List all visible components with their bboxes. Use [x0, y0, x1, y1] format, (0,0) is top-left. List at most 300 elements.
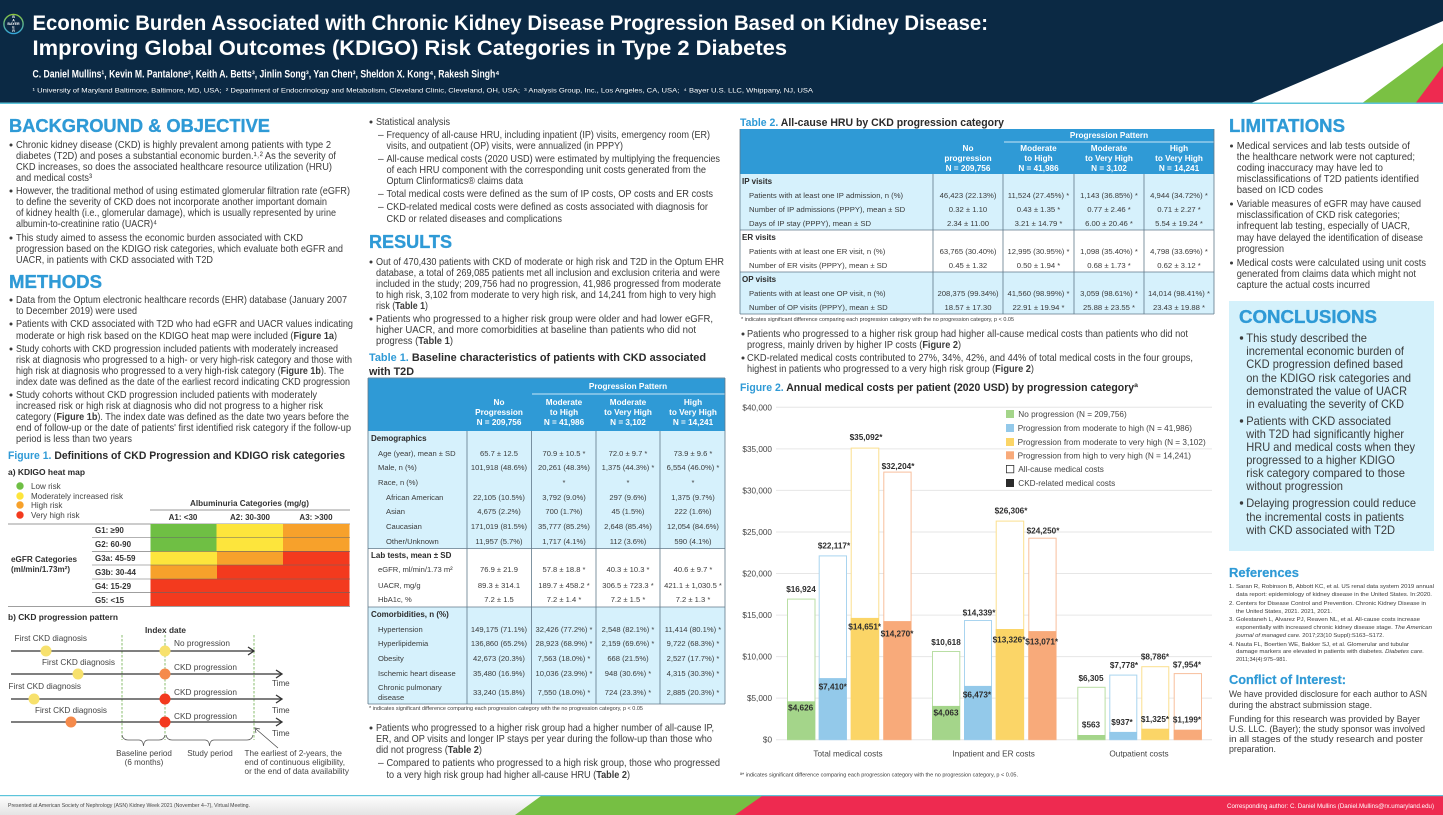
timeline 3: Time — [272, 706, 290, 715]
text block: methods bullets: Study cohorts with CKD progression included patients with moderately increased — [16, 344, 338, 355]
timeline 2: CKD progression — [174, 663, 237, 672]
heading: conclusions: CONCLUSIONS — [1239, 306, 1377, 327]
table 2 OP visit rows: 22.91 ± 19.94 * — [1012, 303, 1065, 312]
bar group: inpatient and ER costs: $10,618 — [931, 638, 961, 647]
timeline 2: Time — [272, 679, 290, 688]
conclusions bullets: CKD progression defined based — [1246, 358, 1403, 371]
table 1 comorbidity rows — [371, 610, 721, 702]
text block: HRU findings — [370, 723, 720, 781]
table 1 header: N = 41,986 — [544, 418, 585, 427]
table 1 demographics rows: 6,554 (46.0%) * — [667, 463, 719, 472]
text block: cost findings: progress, mainly driven by higher IP costs (Figure 2) — [747, 340, 961, 351]
text block: methods bullets: risk at diagnosis who progressed to a high- or very high-risk category and those with — [16, 355, 352, 366]
text block: conflict of interest: Funding for this research was provided by Bayer — [1229, 714, 1420, 724]
legend: risk levels: Moderately increased risk — [31, 492, 124, 501]
conclusions bullets: incremental economic burden of — [1246, 345, 1405, 358]
bar group: total medical costs: $22,117* — [818, 542, 851, 551]
arrow and end-of-study note: The earliest of 2-years, the — [244, 749, 342, 758]
table 1 comorbidity rows: 136,860 (65.2%) — [471, 639, 528, 648]
table 2 header: Moderate — [1020, 144, 1057, 153]
table 1 lab test rows: 40.3 ± 10.3 * — [606, 565, 650, 574]
table 1 heading: with T2D — [368, 366, 414, 378]
bar group: inpatient and ER costs: $13,326* — [993, 636, 1026, 645]
text block: conflict of interest: We have provided disclosure for each author to ASN — [1229, 689, 1427, 699]
table 1 demographics rows: * — [692, 478, 695, 487]
text block: results bullets: higher UACR, and more comorbidities at baseline than patients who did not — [376, 325, 696, 336]
text block: references: Nauta FL, Boertien WE, Bakker SJ, et al. Glomerular and tubular — [1236, 642, 1409, 648]
timeline 1: No progression — [174, 639, 230, 648]
arrow and end-of-study note: or the end of data availability — [244, 767, 350, 776]
text block: HRU findings: – — [378, 758, 384, 769]
table 2 ER visit rows: Number of ER visits (PPPY), mean ± SD — [749, 261, 888, 270]
text block: methods bullets: end of follow-up or the date of patients' first identified risk category if the follow-up — [16, 423, 351, 434]
albuminuria header: A1: <30 — [169, 513, 198, 522]
text block: background bullets: and medical costs³ — [16, 173, 93, 184]
eGFR row labels: G3a: 45-59 — [95, 554, 136, 563]
table 1 demographics rows: 297 (9.6%) — [609, 493, 647, 502]
table 1 header: Progression Pattern — [589, 382, 667, 391]
text block: statistical analysis: CKD or related diseases and complications — [386, 214, 562, 225]
text block: references: 4. — [1229, 642, 1234, 648]
heading: results: RESULTS — [369, 231, 452, 252]
text block: conflict of interest: preparation. — [1229, 744, 1276, 754]
table 1 demographics rows: 4,675 (2.2%) — [477, 507, 521, 516]
heading: methods: METHODS — [9, 271, 102, 292]
table 1 header — [368, 378, 725, 431]
text block: HRU findings: Patients who progressed to a higher risk group had a higher number of all-cause IP, — [376, 723, 714, 734]
text block: limitations: progression — [1237, 244, 1284, 255]
table 2 header — [740, 129, 1214, 174]
table 1 footnote: * indicates significant difference comparing each progression category with the no progression category, p < 0.05 — [369, 706, 643, 712]
timeline 4: Time — [272, 729, 290, 738]
icon: Bayer logo: A — [12, 18, 15, 22]
bar group: inpatient and ER costs: $13,071* — [1025, 638, 1059, 647]
text block: limitations: capture the actual costs incurred — [1237, 280, 1370, 291]
icon: Bayer logo: B — [12, 15, 15, 19]
icon: Bayer logo: BAYER — [7, 22, 20, 26]
text block: background bullets: Chronic kidney disease (CKD) is highly prevalent among patients with type 2 — [16, 140, 331, 151]
table 1 demographics rows: 101,918 (48.6%) — [471, 463, 528, 472]
table 1 demographics rows: 35,777 (85.2%) — [538, 522, 590, 531]
table 2 ER visit rows: 0.50 ± 1.94 * — [1017, 261, 1060, 270]
chart grid and y axis: $10,000 — [742, 653, 772, 662]
table 1 demographics rows: 112 (3.6%) — [610, 537, 647, 546]
chart grid and y axis: $15,000 — [742, 611, 772, 620]
text block: results bullets — [370, 257, 724, 347]
table 1 lab test rows: UACR, mg/g — [378, 581, 421, 590]
table 2 IP visit rows: Number of IP admissions (PPPY), mean ± SD — [749, 205, 906, 214]
bar group: outpatient costs: $1,325* — [1141, 715, 1170, 724]
figure 2 heading: Figure 2. Annual medical costs per patient (2020 USD) by progression categoryª — [740, 382, 1138, 394]
table 1 comorbidity rows: 7,563 (18.0%) * — [538, 654, 590, 663]
bar group: outpatient costs: Outpatient costs — [1109, 750, 1169, 759]
bar group: outpatient costs — [1077, 653, 1202, 759]
footer band — [0, 795, 1443, 815]
timeline 3 — [8, 682, 290, 715]
table 1 demographics rows: 3,792 (9.0%) — [542, 493, 586, 502]
table 2 IP visit rows: 4,944 (34.72%) * — [1150, 191, 1208, 200]
table 2 OP visit rows: 23.43 ± 19.88 * — [1153, 303, 1205, 312]
table 2 OP visit rows: 3,059 (98.61%) * — [1080, 289, 1138, 298]
table 1 comorbidity rows: 724 (23.3%) * — [605, 688, 651, 697]
albuminuria header: Albuminuria Categories (mg/g) — [190, 499, 309, 508]
text block: HRU findings: did not progress (Table 2) — [376, 745, 482, 756]
bar group: outpatient costs: $937* — [1111, 718, 1134, 727]
table 2 header: N = 41,986 — [1018, 164, 1059, 173]
conclusions bullets: risk category compared to those — [1246, 467, 1405, 480]
table 2 IP visit rows: 46,423 (22.13%) — [940, 191, 997, 200]
table 1 comorbidity rows: Chronic pulmonary — [378, 683, 442, 692]
table 1 demographics rows: Male, n (%) — [378, 463, 417, 472]
table 1 demographics rows: 1,375 (9.7%) — [671, 493, 715, 502]
table 1 demographics rows: 70.9 ± 10.5 * — [542, 449, 586, 458]
table 1 lab test rows: HbA1c, % — [378, 595, 412, 604]
table 2 header: progression — [944, 154, 992, 163]
period braces — [116, 735, 253, 767]
bar group: total medical costs: $4,626 — [788, 704, 814, 713]
text block: methods bullets: category (Figure 1b). The index date was defined as the date two years before the — [16, 412, 349, 423]
conclusions bullets: with CKD associated with T2D — [1245, 524, 1395, 537]
text block: methods bullets: Patients with CKD associated with T2D who had eGFR and UACR values indicating — [16, 319, 353, 330]
chart grid and y axis — [742, 403, 1212, 745]
text block: limitations: Medical services and lab tests outside of — [1237, 141, 1410, 152]
table 1 lab test rows: 189.7 ± 458.2 * — [538, 581, 590, 590]
conclusions bullets: Patients with CKD associated — [1246, 415, 1391, 428]
chart legend: Progression from moderate to high (N = 41,986) — [1018, 424, 1192, 433]
table 1 lab test rows: 7.2 ± 1.4 * — [547, 595, 581, 604]
table 2: all-cause HRU — [740, 129, 1214, 314]
eGFR row labels — [11, 526, 136, 605]
panel: CKD progression pattern: b) CKD progression pattern — [8, 613, 118, 622]
table 1 demographics rows: Other/Unknown — [386, 537, 439, 546]
table 1 demographics rows: 22,105 (10.5%) — [473, 493, 525, 502]
heading: limitations: LIMITATIONS — [1229, 115, 1345, 136]
table 1: baseline characteristics — [368, 378, 725, 704]
chart grid and y axis: $40,000 — [742, 403, 772, 412]
table 2 OP visit rows: Patients with at least one OP visit, n (%) — [749, 289, 886, 298]
heading: conflict of interest: Conflict of Interest: — [1229, 672, 1346, 687]
chart grid and y axis: $35,000 — [742, 445, 772, 454]
text block: methods bullets: Study cohorts without CKD progression included patients with moderately — [16, 390, 318, 401]
text block: statistical analysis: CKD-related medical costs were defined as costs associated with diagnosis for — [386, 202, 709, 213]
timeline 4: CKD progression — [174, 712, 237, 721]
bar group: outpatient costs: $7,778* — [1110, 661, 1139, 670]
table 1 heading: Table 1. Baseline characteristics of patients with CKD associated — [369, 352, 706, 364]
table 1 demographics rows: Age (year), mean ± SD — [378, 449, 456, 458]
albuminuria header: A2: 30-300 — [230, 513, 271, 522]
table 2 header: N = 3,102 — [1091, 164, 1127, 173]
conclusions bullets: HRU and medical costs when they — [1246, 441, 1415, 454]
table 1 demographics rows: 20,261 (48.3%) — [538, 463, 590, 472]
table 1 header: N = 14,241 — [673, 418, 714, 427]
bar group: total medical costs: $35,092* — [850, 433, 883, 442]
conclusions bullets: the incremental costs in patients — [1246, 511, 1404, 524]
icon: Bayer logo — [4, 14, 23, 34]
bar group: total medical costs — [786, 433, 915, 759]
text block: HRU findings: Compared to patients who progressed to a high risk group, those who progressed — [386, 758, 720, 769]
text block: references — [1229, 584, 1434, 663]
table 1 demographics rows: 590 (4.1%) — [674, 537, 712, 546]
conclusions bullets — [1240, 332, 1416, 537]
table 1 demographics rows: Demographics — [371, 434, 427, 443]
table 1 demographics rows: 45 (1.5%) — [612, 507, 645, 516]
arrow and end-of-study note: end of continuous eligibility, — [244, 758, 345, 767]
table 1 demographics rows: 72.0 ± 9.7 * — [609, 449, 647, 458]
text block: limitations: Variable measures of eGFR may have caused — [1237, 199, 1421, 210]
text block: conflict of interest: in all stages of the study research and poster — [1229, 734, 1423, 744]
table 1 comorbidity rows: 2,548 (82.1%) * — [602, 625, 654, 634]
text block: methods bullets: period is less than two years — [16, 434, 132, 445]
bar group: outpatient costs: $1,199* — [1173, 716, 1202, 725]
conclusions bullets: Delaying progression could reduce — [1246, 497, 1416, 510]
text block: statistical analysis: – — [378, 189, 384, 200]
text block: statistical analysis: Optum Clinformatics® claims data — [386, 176, 523, 187]
bar group: inpatient and ER costs: $26,306* — [995, 507, 1028, 516]
legend: risk levels: Low risk — [31, 482, 62, 491]
text block: methods bullets: moderate or high risk based on the KDIGO heat map were included (Figure 1a) — [16, 331, 337, 342]
bar group: inpatient and ER costs: Inpatient and ER costs — [953, 750, 1035, 759]
conclusions bullets: in evaluating the severity of CKD — [1246, 398, 1404, 411]
chart legend: No progression (N = 209,756) — [1018, 410, 1127, 419]
table 1 comorbidity rows: Obesity — [378, 654, 404, 663]
table 1 comorbidity rows: 33,240 (15.8%) — [473, 688, 525, 697]
text block: limitations: infrequent lab testing, especially of UACR, — [1237, 221, 1410, 232]
icon: Bayer logo: E — [12, 26, 15, 30]
text block: background bullets: However, the traditional method of using estimated glomerular filtration rate (eGFR) — [16, 186, 350, 197]
text block: references: Saran R, Robinson B, Abbott KC, et al. US renal data system 2019 annual — [1236, 584, 1434, 590]
table 2 ER visit rows: Patients with at least one ER visit, n (%) — [749, 247, 886, 256]
conclusions bullets: progressed to a higher KDIGO — [1246, 454, 1395, 467]
eGFR row labels: (ml/min/1.73m²) — [11, 565, 70, 574]
eGFR row labels: G2: 60-90 — [95, 540, 132, 549]
table 1 header: High — [684, 398, 702, 407]
table 2 header: N = 209,756 — [946, 164, 991, 173]
table 2 OP visit rows: 14,014 (98.41%) * — [1148, 289, 1210, 298]
title — [32, 11, 988, 60]
authors: C. Daniel Mullins¹, Kevin M. Pantalone², Keith A. Betts³, Jinlin Song³, Yan Chen³, Sheldon X. Kong⁴, Rakesh Singh⁴ — [32, 68, 500, 80]
table 1 comorbidity rows: 32,426 (77.2%) * — [536, 625, 593, 634]
text block: statistical analysis — [370, 117, 720, 225]
table 1 comorbidity rows: disease — [378, 693, 404, 702]
table 1 demographics rows: Race, n (%) — [378, 478, 419, 487]
bar group: total medical costs: $7,410* — [819, 683, 848, 692]
conclusions bullets: without progression — [1245, 480, 1343, 493]
table 2 ER visit rows — [742, 233, 1208, 270]
table 2 IP visit rows: 11,524 (27.45%) * — [1008, 191, 1069, 200]
chart grid and y axis: $5,000 — [747, 694, 772, 703]
table 1 demographics rows: * — [627, 478, 630, 487]
chart legend: Progression from high to very high (N = 14,241) — [1018, 451, 1191, 460]
table 1 demographics rows: 11,957 (5.7%) — [475, 537, 523, 546]
table 1 header: No — [494, 398, 504, 407]
table 1 lab test rows: 76.9 ± 21.9 — [480, 565, 518, 574]
table 1 header: Moderate — [546, 398, 583, 407]
table 2 IP visit rows — [742, 177, 1208, 228]
chart legend: All-cause medical costs — [1018, 465, 1104, 474]
table 1 header: Moderate — [610, 398, 647, 407]
text block: background bullets — [10, 140, 350, 266]
text block: background bullets: of kidney health (i.e., glomerular damage), which is usually represented by urine — [16, 208, 336, 219]
table 1 comorbidity rows: Hypertension — [378, 625, 423, 634]
table 1 lab test rows: eGFR, ml/min/1.73 m² — [378, 565, 453, 574]
chart legend: Progression from moderate to very high (N = 3,102) — [1018, 438, 1206, 447]
table 2 IP visit rows: 2.34 ± 11.00 — [947, 219, 989, 228]
text block: references: data report: epidemiology of kidney disease in the United States. In:2020. — [1236, 592, 1432, 598]
table 1 header: Progression — [475, 408, 523, 417]
panel: conclusions — [1229, 301, 1434, 551]
table 1 comorbidity rows: 10,036 (23.9%) * — [536, 669, 593, 678]
bar group: total medical costs: $14,651* — [848, 623, 882, 632]
text block: background bullets: progression based on the KDIGO risk categories, which evaluate both eGFR and — [16, 244, 343, 255]
table 1 lab test rows: 306.5 ± 723.3 * — [602, 581, 654, 590]
text block: limitations: may have delayed the identification of disease — [1237, 233, 1423, 244]
bar group: total medical costs: $16,924 — [786, 585, 816, 594]
legend: risk levels — [16, 482, 124, 520]
table 2 OP visit rows: Number of OP visits (PPPY), mean ± SD — [749, 303, 888, 312]
chart legend — [1006, 410, 1206, 488]
timeline 2: First CKD diagnosis — [42, 658, 115, 667]
text block: methods bullets: to December 2019) were used — [16, 306, 137, 317]
timeline 4: First CKD diagnosis — [35, 706, 107, 715]
eGFR row labels: G1: ≥90 — [95, 526, 124, 535]
legend: risk levels: Very high risk — [31, 511, 81, 520]
table 1 lab test rows: 421.1 ± 1,030.5 * — [664, 581, 722, 590]
text block: references: 1. — [1229, 584, 1234, 590]
text block: cost findings: Patients who progressed to a higher risk group had higher all-cause medical costs than patients who did not — [747, 329, 1188, 340]
decorative triangles: white, green, red — [1252, 21, 1443, 102]
table 2 ER visit rows: ER visits — [742, 233, 776, 242]
text block: results bullets: database, a total of 269,085 patients met all inclusion and exclusion criteria and were — [376, 268, 720, 279]
chart grid and y axis: $20,000 — [742, 570, 772, 578]
table 1 demographics rows: 12,054 (84.6%) — [667, 522, 719, 531]
chart grid and y axis: $30,000 — [742, 486, 772, 495]
timeline 3: CKD progression — [174, 688, 237, 697]
chart grid and y axis: $0 — [763, 736, 772, 745]
bar group: inpatient and ER costs: $24,250* — [1027, 527, 1060, 536]
table 2 IP visit rows: 5.54 ± 19.24 * — [1155, 219, 1203, 228]
table 2 ER visit rows: 4,798 (33.69%) * — [1150, 247, 1208, 256]
bar group: total medical costs: Total medical costs — [813, 750, 883, 759]
table 2 header: No — [963, 144, 973, 153]
table 1 comorbidity rows: 149,175 (71.1%) — [471, 625, 528, 634]
legend: risk levels: High risk — [31, 501, 63, 510]
text block: cost findings: CKD-related medical costs contributed to 27%, 34%, 42%, and 44% of total medical costs in the four groups, — [747, 353, 1193, 364]
text block: statistical analysis: Statistical analysis — [376, 117, 450, 128]
text block: results bullets: Out of 470,430 patients with CKD of moderate or high risk and T2D in the Optum EHR — [376, 257, 724, 268]
timeline 4 — [11, 706, 290, 738]
presentation note: Presented at American Society of Nephrology (ASN) Kidney Week 2021 (November 4–7), Virtual Meeting. — [8, 803, 250, 809]
table 1 lab test rows: 7.2 ± 1.5 — [484, 595, 514, 604]
icon: Bayer logo: R — [12, 29, 15, 33]
text block: background bullets: to define the severity of CKD does not incorporate another important domain — [16, 197, 327, 208]
bar chart: annual medical costs — [742, 403, 1212, 759]
table 1 demographics rows: 1,717 (4.1%) — [542, 537, 586, 546]
conclusions bullets: demonstrated the value of UACR — [1246, 385, 1407, 398]
table 2 header: to High — [1024, 154, 1053, 163]
bar group: outpatient costs: $7,954* — [1173, 660, 1202, 669]
table 1 comorbidity rows: 2,159 (69.6%) * — [602, 639, 654, 648]
text block: limitations: coding inaccuracy may have led to — [1237, 163, 1383, 174]
text block: references: 2011;34(4):975–981. — [1236, 657, 1287, 663]
text block: HRU findings: to a very high risk group had higher all-cause HRU (Table 2) — [386, 770, 630, 781]
table 2 OP visit rows: 18.57 ± 17.30 — [945, 303, 991, 312]
table 1 demographics rows: 171,019 (81.5%) — [471, 522, 528, 531]
table 1 header: to Very High — [604, 408, 652, 417]
table 1 lab test rows: 7.2 ± 1.5 * — [611, 595, 645, 604]
panel: CKD progression pattern: Index date — [145, 626, 187, 635]
table 1 comorbidity rows: Hyperlipidemia — [378, 639, 429, 648]
text block: results bullets: progress (Table 1) — [376, 336, 453, 347]
text block: methods bullets: Data from the Optum electronic healthcare records (EHR) database (January 2007 — [16, 295, 347, 306]
table 1 header: N = 3,102 — [610, 418, 646, 427]
text block: references: the United States, 2021. 2021, 2021. — [1236, 609, 1332, 615]
table 2 header: to Very High — [1155, 154, 1203, 163]
eGFR row labels: eGFR Categories — [11, 555, 78, 564]
table 1 demographics rows: 73.9 ± 9.6 * — [674, 449, 712, 458]
table 2 IP visit rows: Patients with at least one IP admission, n (%) — [749, 191, 904, 200]
affiliations: ¹ University of Maryland Baltimore, Baltimore, MD, USA; ² Department of Endocrinology and Metabolism, Cleveland Clinic, Cleveland, OH, USA; ³ Analysis Group, Inc., Los Angeles, CA, USA; ⁴ Bayer U.S. LLC, Whippany, NJ, USA — [32, 88, 814, 95]
text block: background bullets: UACR, in patients with CKD associated with T2D — [16, 255, 213, 266]
table 1 lab test rows: Lab tests, mean ± SD — [371, 551, 452, 560]
text block: methods bullets: index date was defined as the date of the earliest record indicating CKD progression — [16, 377, 350, 388]
bar group: total medical costs: $14,270* — [881, 630, 914, 639]
table 1 demographics rows: 65.7 ± 12.5 — [480, 449, 518, 458]
text block: references: exponentially with increased chronic kidney disease stage. The American — [1236, 625, 1433, 631]
text block: limitations: Medical costs were calculated using unit costs — [1237, 258, 1426, 269]
text block: limitations: the healthcare network were not captured; — [1237, 152, 1415, 163]
table 1 demographics rows: * — [563, 478, 566, 487]
text block: background bullets: This study aimed to assess the economic burden associated with CKD — [16, 233, 303, 244]
table 2 header: High — [1170, 144, 1188, 153]
text block: conflict of interest: during the abstract submission stage. — [1229, 700, 1372, 710]
text block: references: Golestaneh L, Alvarez PJ, Reaven NL, et al. All-cause costs increase — [1236, 617, 1421, 623]
panel: CKD progression pattern — [8, 613, 350, 776]
table 2 ER visit rows: 0.45 ± 1.32 — [949, 261, 987, 270]
text block: conflict of interest — [1229, 689, 1427, 754]
text block: limitations: generated from claims data which might not — [1237, 269, 1416, 280]
table 1 comorbidity rows: 42,673 (20.3%) — [473, 654, 525, 663]
text block: cost findings: highest in patients who progressed to a very high risk group (Figure 2) — [747, 364, 1034, 375]
table 1 demographics rows: African American — [386, 493, 443, 502]
timeline 1 — [11, 634, 254, 656]
timeline 2 — [11, 658, 290, 688]
text block: conflict of interest: U.S. LLC. (Bayer); the study sponsor was involved — [1229, 724, 1425, 734]
text block: limitations: based on ICD codes — [1237, 185, 1323, 196]
chart grid and y axis: $25,000 — [742, 528, 772, 537]
table 2 ER visit rows: 0.62 ± 3.12 * — [1157, 261, 1201, 270]
table 1 section backgrounds and rules — [368, 378, 725, 704]
albuminuria header: A3: >300 — [299, 513, 333, 522]
albuminuria header — [8, 499, 350, 524]
text block: references: damage markers are elevated in patients with diabetes. Diabetes care. — [1236, 649, 1424, 655]
table 1 comorbidity rows: 11,414 (80.1%) * — [665, 625, 721, 634]
table 2 heading: Table 2. All-cause HRU by CKD progression category — [740, 117, 1004, 129]
text block: references: 3. — [1229, 617, 1234, 623]
conclusions bullets: on the KDIGO risk categories and — [1246, 372, 1411, 385]
table 1 demographics rows: 1,375 (44.3%) * — [602, 463, 654, 472]
table 2 ER visit rows: 63,765 (30.40%) — [940, 247, 997, 256]
conclusions bullets: with T2D had significantly higher — [1245, 428, 1404, 441]
table 2 ER visit rows: 0.68 ± 1.73 * — [1087, 261, 1131, 270]
heading: references: References — [1229, 565, 1299, 580]
text block: results bullets: risk (Table 1) — [376, 301, 428, 312]
table 1 comorbidity rows: 9,722 (68.3%) * — [667, 639, 719, 648]
text block: statistical analysis: Total medical costs were defined as the sum of IP costs, OP costs and ER costs — [386, 189, 713, 200]
table 2 header: N = 14,241 — [1159, 164, 1200, 173]
text block: results bullets: Patients who progressed to a higher risk group were older and had lower eGFR, — [376, 314, 713, 325]
table 1 lab test rows: 40.6 ± 9.7 * — [674, 565, 712, 574]
title: Improving Global Outcomes (KDIGO) Risk Categories in Type 2 Diabetes — [32, 36, 787, 60]
